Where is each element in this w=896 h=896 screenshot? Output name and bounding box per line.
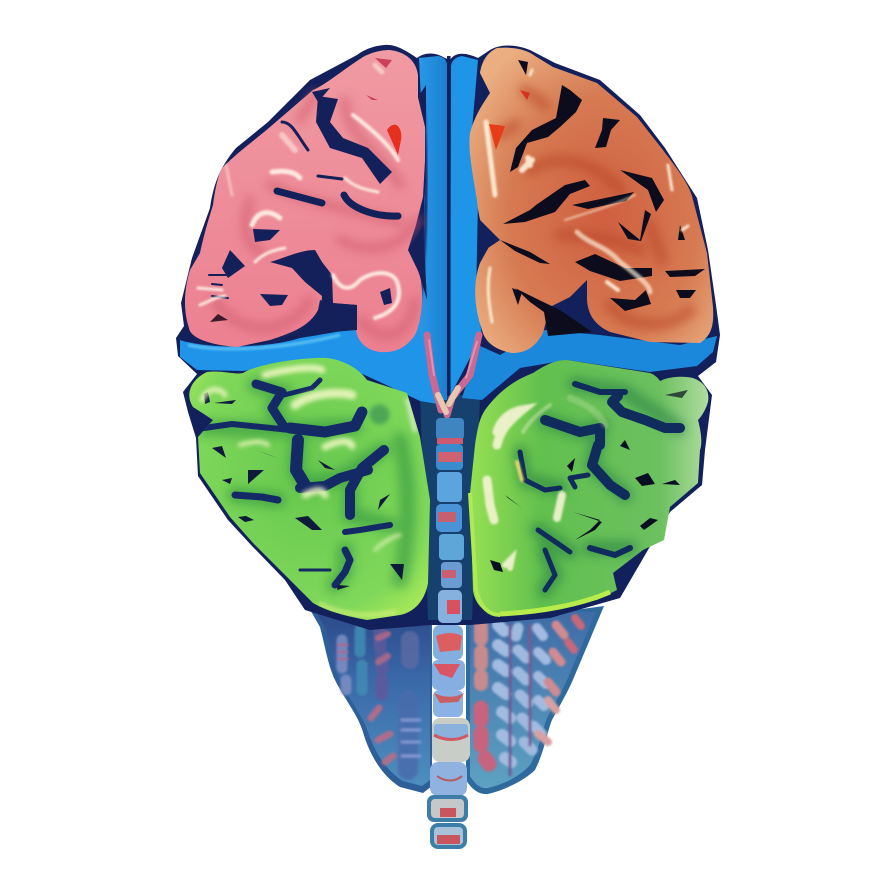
spine: pink nerve tubes [427,335,479,415]
blue band: upper right vertical [450,56,482,396]
spine: lower vertebrae [438,590,462,623]
pink dark cavities [222,85,427,333]
pink highlights [198,65,399,318]
orange shading [500,90,690,324]
lower fan: brainstem tissue [300,590,604,794]
orange highlights [486,70,688,322]
blue central bands [180,56,717,404]
green dark channels [204,380,390,585]
navy silhouette behind the lobes [176,45,720,630]
green highlights [487,398,605,568]
spinal column [427,335,479,849]
blue band: horizontal right [462,330,717,400]
upper-left lobe: pink [185,50,427,352]
green shading [520,384,678,590]
spine: upper vertebrae [436,418,464,440]
fan texture: right [481,618,581,775]
lower-left lobe: green [189,358,430,620]
green dark channels [520,384,680,590]
red accent [387,125,401,155]
red accent [489,124,505,150]
green shading [205,385,408,585]
orange dark cavities [480,60,705,336]
pink shading [215,95,418,335]
green highlights [202,368,415,615]
lower-right lobe: green [470,360,708,615]
upper-right lobe: orange [469,48,713,353]
brain infographic illustration [176,44,720,849]
central dark teal behind spine [420,395,480,620]
blue band: horizontal left [180,328,438,404]
fan texture: left [337,630,420,770]
blue band: upper left vertical [415,56,447,400]
